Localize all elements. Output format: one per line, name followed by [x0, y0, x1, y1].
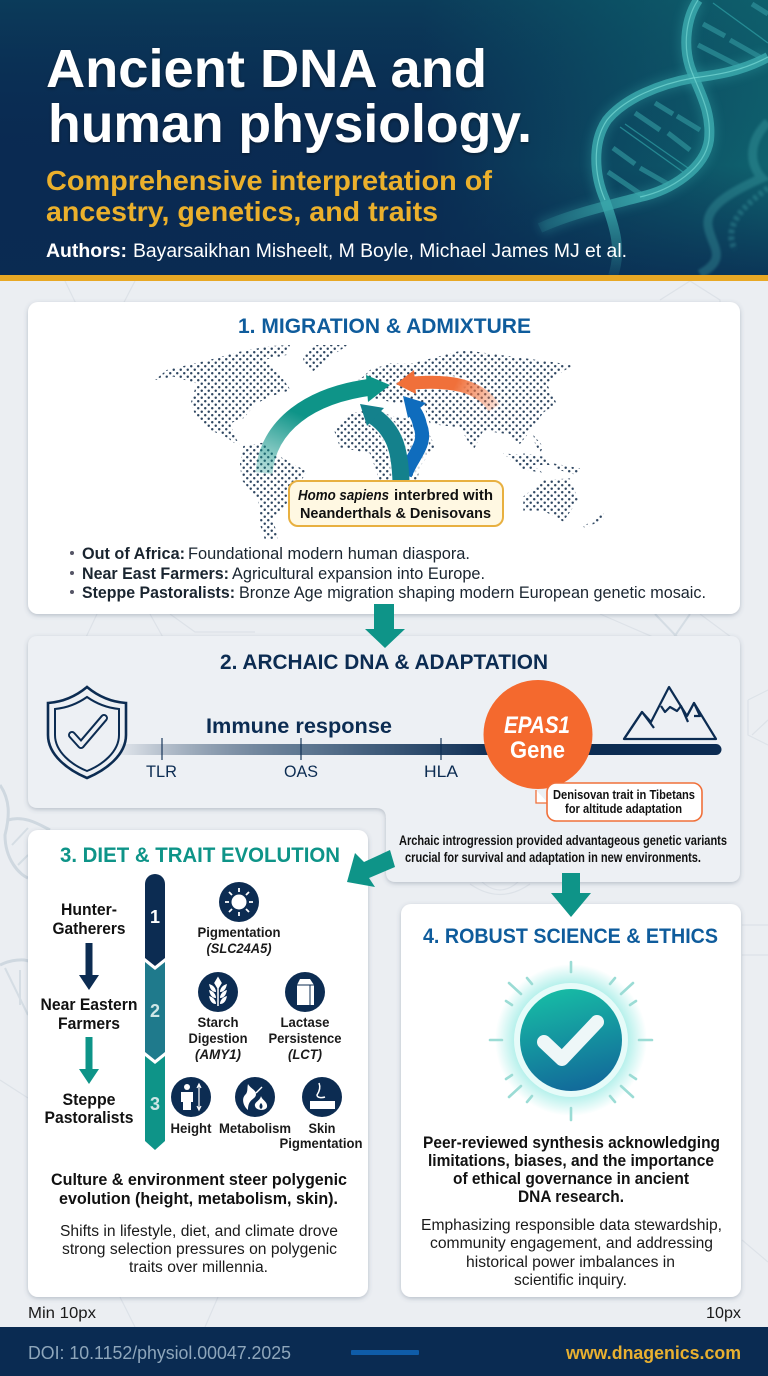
- bullet list: Steppe Pastoralists:: [82, 584, 235, 602]
- heading 2: 2. ARCHAIC DNA & ADAPTATION: [220, 651, 548, 674]
- heading 1: 1. MIGRATION & ADMIXTURE: [238, 315, 531, 338]
- population sequence: Steppe: [62, 1091, 116, 1109]
- ethics body text: historical power imbalances in: [466, 1254, 675, 1271]
- icon: shield with check: [48, 687, 126, 778]
- labels: polygenic traits: Pigmentation: [280, 1135, 362, 1151]
- peer-reviewed bold text: [423, 1134, 720, 1206]
- website: www.dnagenics.com: [565, 1343, 741, 1363]
- panel 3: diet and trait evolution: [28, 830, 368, 1297]
- ethics body text: Emphasizing responsible data stewardship,: [421, 1217, 722, 1234]
- callout: interbreeding: Neanderthals & Denisovans: [300, 506, 491, 522]
- dotted world map: [155, 345, 605, 540]
- title: [46, 39, 532, 154]
- header banner: [0, 0, 768, 276]
- panel 1: migration and admixture: [28, 302, 740, 614]
- background decoration: hexagons and faint DNA: [0, 281, 768, 1327]
- bullet list: Near East Farmers:: [82, 565, 229, 583]
- immune response gene bar: TLR: [146, 762, 177, 781]
- icon: glowing check badge: [490, 962, 652, 1120]
- icon: DNA double helix: [540, 0, 768, 276]
- archaic introgression text: [399, 833, 727, 865]
- DOI: DOI: 10.1152/physiol.00047.2025: [28, 1343, 291, 1363]
- summary body text: [60, 1223, 338, 1276]
- summary bold text: [51, 1171, 347, 1208]
- population sequence: Hunter-: [61, 901, 117, 919]
- heading 3: 3. DIET & TRAIT EVOLUTION: [60, 844, 340, 867]
- label: lactase persistence: Persistence: [268, 1030, 342, 1046]
- stage ribbon: 2: [150, 1001, 160, 1021]
- icon: wheat: [198, 972, 238, 1012]
- footer bar: [0, 1327, 768, 1376]
- arrow: panel 2 to panel 4: [551, 873, 591, 917]
- callout: interbreeding: Homo sapiens: [298, 488, 389, 504]
- label: lactase persistence: [268, 1014, 342, 1062]
- immune response gene bar: OAS: [284, 762, 318, 781]
- ethics body text: [421, 1217, 722, 1289]
- authors: Bayarsaikhan Misheelt, M Boyle, Michael James MJ et al.: [133, 241, 627, 262]
- summary bold text: evolution (height, metabolism, skin).: [59, 1190, 338, 1208]
- arrow: Out of Africa to Americas: [264, 375, 390, 473]
- migration arrows: [264, 370, 494, 482]
- arrow: teal-blue migration: [360, 404, 401, 482]
- stage ribbon: 1: [150, 907, 160, 927]
- title: human physiology.: [48, 94, 532, 154]
- archaic introgression text: crucial for survival and adaptation in new environments.: [405, 850, 701, 865]
- callout: Denisovan trait: for altitude adaptation: [565, 801, 682, 816]
- label: pigmentation: [198, 924, 280, 956]
- margin note right: 10px: [706, 1305, 741, 1322]
- ethics body text: community engagement, and addressing: [430, 1235, 713, 1252]
- peer-reviewed bold text: Peer-reviewed synthesis acknowledging: [423, 1134, 720, 1152]
- labels: polygenic traits: Metabolism: [219, 1120, 291, 1136]
- EPAS1 gene badge: Gene: [510, 737, 565, 764]
- subtitle: [46, 165, 493, 227]
- panel 2: archaic DNA and adaptation: [28, 636, 740, 882]
- icon: sun pigmentation: [219, 882, 259, 922]
- labels: polygenic traits: Height: [170, 1120, 212, 1136]
- bullet list: Out of Africa:: [82, 545, 185, 563]
- peer-reviewed bold text: limitations, biases, and the importance: [428, 1152, 714, 1170]
- labels: polygenic traits: Skin: [308, 1120, 336, 1136]
- callout: Denisovan trait: [536, 783, 702, 821]
- heading 4: 4. ROBUST SCIENCE & ETHICS: [423, 925, 718, 948]
- immune response gene bar: [120, 715, 722, 781]
- label: starch digestion: Digestion: [188, 1030, 248, 1046]
- arrow: panel 1 to panel 2: [365, 604, 405, 648]
- peer-reviewed bold text: of ethical governance in ancient: [453, 1170, 689, 1188]
- label: lactase persistence: Lactase: [280, 1014, 330, 1030]
- gold divider: [0, 275, 768, 281]
- callout: interbreeding: interbred with: [394, 488, 493, 504]
- population sequence: Pastoralists: [44, 1109, 134, 1127]
- bullet list: [70, 545, 706, 602]
- population sequence: Farmers: [58, 1015, 120, 1033]
- label: pigmentation: Pigmentation: [198, 924, 280, 940]
- arrow: blue migration: [403, 396, 426, 475]
- callout: interbreeding: [289, 481, 503, 526]
- title: Ancient DNA and: [46, 39, 487, 99]
- bullet list: Agricultural expansion into Europe.: [232, 565, 485, 583]
- summary bold text: Culture & environment steer polygenic: [51, 1171, 347, 1189]
- labels: polygenic traits: [170, 1120, 362, 1151]
- summary body text: strong selection pressures on polygenic: [62, 1241, 337, 1258]
- icon: mountains: [624, 687, 716, 739]
- EPAS1 gene badge: EPAS1: [504, 712, 570, 739]
- icon: milk carton: [285, 972, 325, 1012]
- stage ribbon: 3: [150, 1094, 160, 1114]
- bullet list: Foundational modern human diaspora.: [188, 545, 470, 563]
- EPAS1 gene badge: [484, 680, 592, 789]
- label: starch digestion: Starch: [198, 1014, 238, 1030]
- label: starch digestion: (AMY1): [195, 1046, 241, 1062]
- authors: Authors:: [46, 241, 127, 262]
- margin note left: Min 10px: [28, 1305, 96, 1322]
- bullet list: Bronze Age migration shaping modern European genetic mosaic.: [239, 584, 706, 602]
- immune response gene bar: HLA: [424, 762, 459, 781]
- peer-reviewed bold text: DNA research.: [518, 1188, 624, 1206]
- icon: skin pigmentation: [302, 1077, 342, 1117]
- icon: metabolism: [235, 1077, 275, 1117]
- summary body text: Shifts in lifestyle, diet, and climate drove: [60, 1223, 338, 1240]
- stage ribbon: [145, 874, 165, 1150]
- ethics body text: scientific inquiry.: [514, 1272, 627, 1289]
- immune response gene bar: Immune response: [206, 715, 392, 738]
- panel 4: robust science and ethics: [401, 904, 741, 1297]
- icon: height: [171, 1077, 211, 1117]
- population sequence: [40, 901, 138, 1127]
- label: pigmentation: (SLC24A5): [206, 940, 272, 956]
- population sequence: Near Eastern: [40, 996, 138, 1014]
- population sequence: Gatherers: [52, 920, 126, 938]
- arrow: hunter-gatherers to farmers: [79, 943, 99, 990]
- label: starch digestion: [188, 1014, 248, 1062]
- footer accent bar: [351, 1350, 419, 1355]
- arrow: panel 2 to panel 3: [347, 850, 395, 887]
- subtitle: ancestry, genetics, and traits: [46, 196, 438, 227]
- summary body text: traits over millennia.: [129, 1259, 268, 1276]
- label: lactase persistence: (LCT): [288, 1046, 322, 1062]
- subtitle: Comprehensive interpretation of: [46, 165, 493, 196]
- arrow: farmers to pastoralists: [79, 1037, 99, 1084]
- callout: Denisovan trait: Denisovan trait in Tibetans: [553, 787, 695, 802]
- arrow: orange steppe migration: [396, 370, 494, 408]
